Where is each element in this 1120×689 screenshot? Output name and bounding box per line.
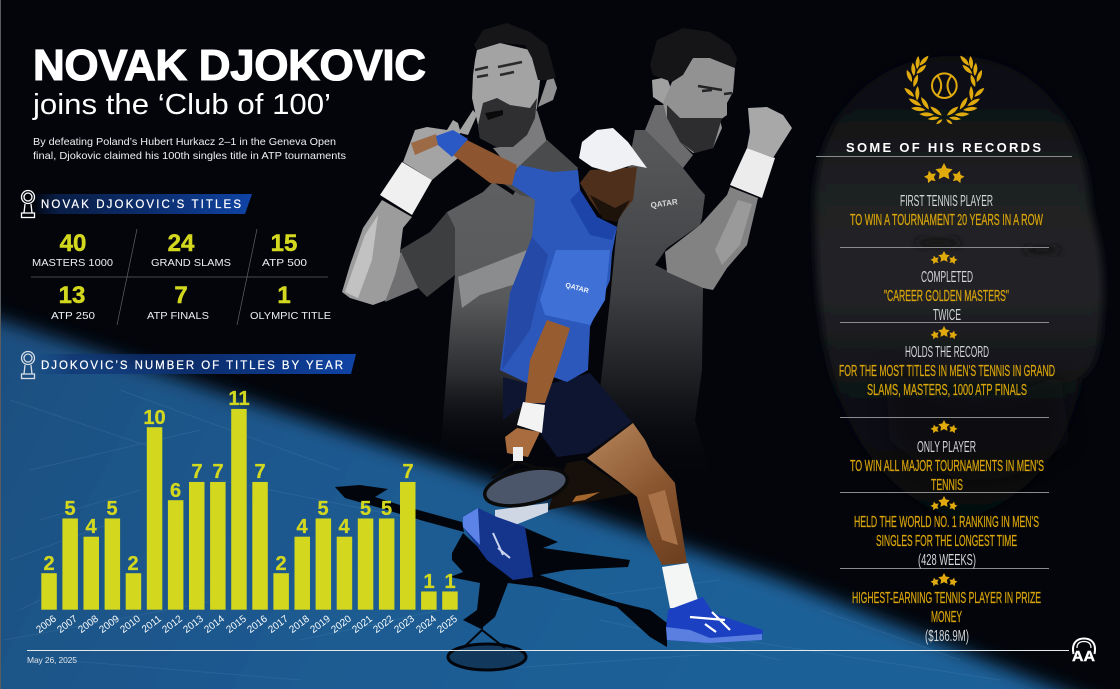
panel: title counts: 40	[60, 230, 86, 257]
bar chart: titles by year: 2014	[202, 613, 227, 636]
blue tennis court	[0, 310, 1110, 689]
right player fist	[747, 107, 792, 158]
panel: records list	[816, 156, 1072, 645]
bar chart: titles by year: 2	[275, 553, 287, 575]
bar chart: titles by year: 7	[254, 461, 266, 483]
intro text: final, Djokovic claimed his 100th singles title in ATP tournaments	[33, 150, 346, 162]
record 3: HOLDS THE RECORD	[905, 344, 989, 361]
right player neck	[645, 105, 693, 168]
record 4	[850, 420, 1044, 494]
court shadow of the player	[335, 485, 667, 670]
footer line	[27, 650, 1069, 652]
left arm highlight	[345, 215, 378, 298]
panel: title counts: OLYMPIC TITLE	[250, 310, 331, 322]
bar chart: titles by year: 2017	[266, 613, 291, 636]
panel: title counts: ATP 500	[262, 257, 307, 269]
front shoe	[666, 597, 763, 643]
bar chart: titles by year: 4	[338, 516, 350, 538]
racket shadow	[448, 630, 526, 670]
bar chart: titles by year	[34, 388, 460, 636]
bar chart: titles by year: 4	[296, 516, 308, 538]
panel: title counts: ATP FINALS	[147, 310, 209, 322]
right player hair	[650, 28, 737, 82]
section header: titles: NOVAK DJOKOVIC’S TITLES	[41, 199, 241, 211]
right player ear	[652, 77, 672, 105]
wristband lower	[517, 402, 545, 433]
left arm inner shade	[385, 252, 418, 302]
cap	[579, 128, 647, 172]
bar chart: titles by year: 1	[444, 571, 456, 593]
front sock	[662, 563, 700, 608]
icon: trophy small	[22, 352, 34, 378]
section header: titles by year	[22, 352, 356, 378]
panel: title counts: ATP 250	[51, 310, 95, 322]
bar chart: titles by year: 4	[85, 516, 97, 538]
right player torso	[590, 130, 712, 480]
logo: AA	[1072, 638, 1095, 665]
bar chart: titles by year: 2011	[140, 613, 164, 635]
right player face	[663, 58, 735, 153]
left player mouth	[485, 110, 503, 120]
right player arm	[665, 187, 758, 290]
bar chart: titles by year: 2020	[329, 613, 354, 636]
bar chart: titles by year: 2025	[435, 613, 460, 636]
right player beard	[667, 105, 722, 153]
record 1: FIRST TENNIS PLAYER	[900, 193, 993, 210]
back shoe stripes	[493, 533, 510, 558]
section header: titles	[22, 190, 252, 218]
record 6: MONEY	[931, 609, 962, 626]
left player ear	[538, 76, 557, 107]
lower arm	[525, 320, 570, 403]
bar chart: titles by year: 2012	[160, 613, 185, 636]
record 5	[854, 496, 1039, 569]
bar chart: titles by year: 2007	[55, 613, 80, 636]
left player wristband	[380, 162, 432, 215]
intro text	[33, 136, 346, 162]
bar chart: titles by year: 7	[212, 461, 224, 483]
shirt dark side	[502, 237, 548, 370]
gray player right	[590, 28, 792, 480]
bar chart: titles by year: 5	[360, 498, 371, 520]
logo: AA: AA	[1072, 648, 1095, 665]
panel: title counts: 1	[277, 282, 291, 309]
bar chart: titles by year: 2	[43, 553, 55, 575]
sponsor logo text: QATAR	[650, 197, 678, 210]
left player collar	[495, 140, 578, 200]
raised arm	[453, 140, 517, 185]
bar chart: titles by year: 2022	[371, 613, 396, 636]
record 3	[839, 326, 1055, 399]
panel: title counts: 13	[59, 282, 85, 309]
icon: trophy	[22, 190, 34, 218]
racket	[481, 447, 571, 512]
left player sleeve	[400, 212, 455, 297]
left player torso	[440, 140, 578, 458]
bar chart: titles by year: 2023	[392, 613, 417, 636]
shoe sole	[666, 627, 762, 643]
left player eyes	[475, 62, 522, 77]
right player wristband	[730, 148, 775, 198]
record 2: "CAREER GOLDEN MASTERS"	[884, 288, 1009, 305]
bar chart: titles by year: 5	[381, 498, 392, 520]
bar chart: titles by year: 2019	[308, 613, 333, 636]
intro text: By defeating Poland’s Hubert Hurkacz 2–1 in the Geneva Open	[33, 136, 336, 148]
bar chart: titles by year: 2009	[97, 613, 122, 636]
back leg	[548, 460, 633, 510]
shoe stripes	[690, 612, 730, 632]
record 6: ($186.9M)	[925, 628, 969, 645]
bar chart: titles by year: 11	[228, 388, 250, 410]
panel: title counts: 7	[174, 282, 188, 309]
left player neck	[493, 110, 547, 172]
hand lower	[505, 428, 540, 457]
record 5: (428 WEEKS)	[918, 552, 976, 569]
bar chart: titles by year: 2010	[118, 613, 143, 636]
bar chart: titles by year: 10	[143, 407, 166, 429]
right player eyes	[698, 86, 732, 94]
right arm highlight	[715, 200, 752, 265]
bar chart: titles by year: 2024	[414, 613, 439, 636]
beard	[590, 195, 630, 222]
left player arm	[342, 200, 418, 305]
back leg highlight	[572, 492, 600, 502]
record 4: ONLY PLAYER	[917, 439, 976, 456]
left player hair	[474, 23, 556, 80]
left edge line	[0, 0, 1, 689]
panel: title counts: GRAND SLAMS	[151, 257, 231, 269]
bar chart: titles by year: 2008	[76, 613, 101, 636]
bar chart: titles by year: 6	[170, 480, 181, 502]
icon: laurel wreath with tennis ball	[903, 54, 986, 125]
leg highlight	[648, 490, 678, 545]
left player hand	[403, 110, 477, 180]
subtitle: joins the ‘Club of 100’	[32, 89, 331, 121]
shirt collar shade	[570, 190, 617, 240]
front thigh and calf	[587, 423, 687, 565]
panel: title counts: 24	[168, 230, 195, 257]
bar chart: titles by year: 7	[191, 461, 203, 483]
record 6	[852, 573, 1041, 645]
bar chart: titles by year: 2	[127, 553, 139, 575]
shirt	[500, 165, 617, 383]
section header: titles by year: DJOKOVIC’S NUMBER OF TITLES BY YEAR	[41, 360, 343, 372]
bar chart: titles by year: 2006	[34, 613, 59, 636]
center player in colour	[411, 128, 763, 643]
bar chart: titles by year: 5	[106, 498, 118, 520]
shirt shading	[540, 250, 610, 325]
wristband upper	[436, 130, 468, 157]
panel: title counts: 15	[271, 230, 297, 257]
bar chart: titles by year: 7	[402, 461, 414, 483]
bar chart: titles by year: 1	[423, 571, 435, 593]
bar chart: titles by year: 2016	[245, 613, 270, 636]
record 2: COMPLETED	[921, 269, 973, 286]
left player beard	[478, 98, 537, 147]
record 2	[884, 251, 1009, 324]
back shoe accent	[463, 508, 480, 545]
panel: title counts	[31, 229, 331, 325]
bar chart: titles by year: 2021	[350, 613, 375, 636]
bar chart: titles by year: 5	[64, 498, 76, 520]
gray player left	[342, 23, 578, 458]
record 2: TWICE	[933, 307, 961, 324]
bar chart: titles by year: 2018	[287, 613, 312, 636]
bar chart: titles by year: 2015	[224, 613, 249, 636]
back shoe	[463, 508, 533, 580]
back sock	[495, 503, 548, 527]
record 4: TENNIS	[931, 477, 963, 494]
bar chart: titles by year: 2013	[181, 613, 206, 636]
date: May 26, 2025	[27, 655, 77, 665]
raised hand	[411, 134, 438, 155]
bar chart: titles by year: 5	[317, 498, 329, 520]
left player face	[472, 43, 540, 147]
panel: title counts: MASTERS 1000	[32, 257, 113, 269]
records heading: SOME OF HIS RECORDS	[846, 140, 1041, 155]
shorts	[503, 373, 632, 457]
shirt sponsor: QATAR	[564, 282, 589, 295]
title: NOVAK DJOKOVIC	[33, 41, 426, 90]
neck and face	[580, 167, 637, 220]
record 1	[850, 163, 1043, 229]
left player shirt light band	[458, 250, 527, 308]
background portrait: large face	[815, 56, 1103, 520]
